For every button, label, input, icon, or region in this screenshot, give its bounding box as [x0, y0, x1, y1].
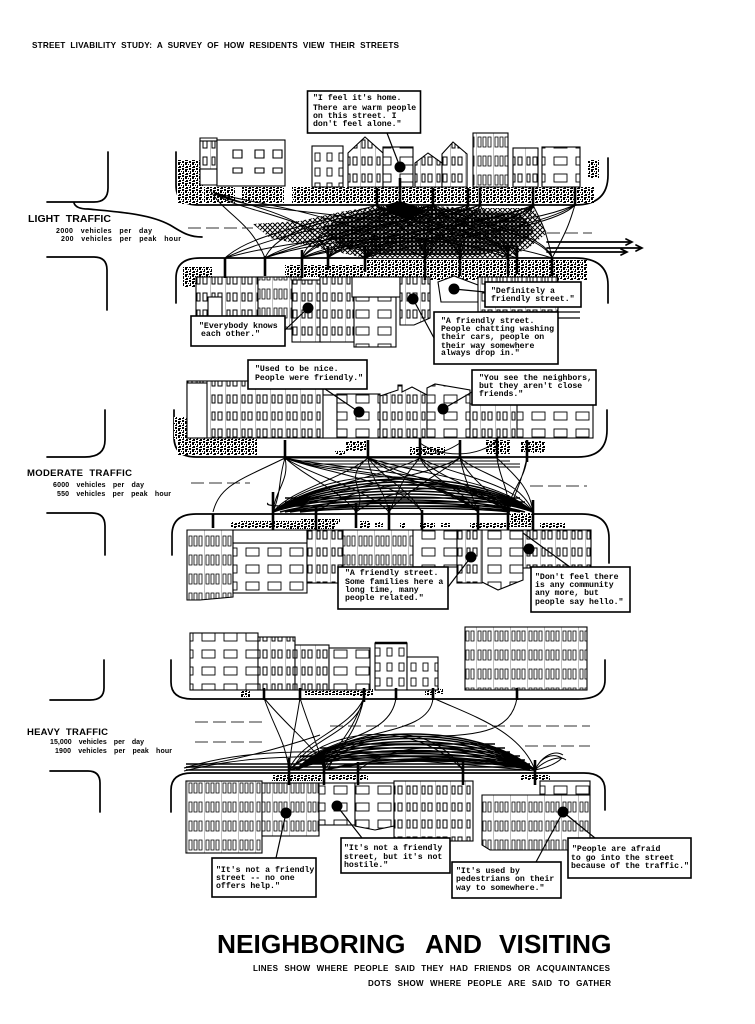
panel: light traffic street [28, 91, 642, 364]
callout: feel it's home: "I feel it's home. [313, 93, 401, 103]
traffic label: light: 200 vehicles per peak hour [61, 236, 181, 243]
friendship lines: moderate traffic network [191, 438, 587, 530]
callout: no community: people say hello." [535, 597, 623, 607]
callout: used by pedestrians [452, 806, 568, 898]
panel: moderate traffic street [27, 360, 630, 612]
callout: people chatting: their way somewhere [441, 341, 534, 351]
callout: feel it's home [308, 91, 420, 172]
callout: definitely friendly: "Definitely a [491, 286, 555, 296]
callout: everybody knows: each other." [201, 329, 260, 339]
callout: no community: "Don't feel there [535, 572, 619, 582]
traffic label: moderate: MODERATE TRAFFIC [27, 468, 132, 479]
traffic label: moderate: 550 vehicles per peak hour [57, 491, 171, 498]
traffic label: light [28, 213, 181, 243]
traffic label: light: 2000 vehicles per day [56, 228, 152, 235]
callout: used by pedestrians: pedestrians on their [456, 874, 554, 884]
callout: no community: any more, but [535, 588, 599, 598]
callout: afraid of traffic [563, 812, 691, 878]
callout: used to be nice [248, 360, 367, 418]
main heading: VISITING [499, 929, 612, 959]
side street curbs [47, 410, 105, 555]
callout: not hostile [332, 800, 450, 873]
callout: afraid of traffic: to go into the street [571, 853, 674, 863]
callout: everybody knows [191, 302, 314, 346]
buildings: north side [171, 627, 605, 699]
callout: definitely friendly: friendly street." [491, 294, 575, 304]
callout: you see the neighbors: but they aren't close [479, 381, 582, 391]
traffic label: heavy: 15,000 vehicles per day [50, 739, 144, 746]
side street curbs [50, 660, 104, 812]
buildings: south side [176, 258, 608, 347]
callout: no one offers help [212, 808, 316, 897]
callout: people chatting: always drop in." [441, 348, 520, 358]
callout: no one offers help: offers help." [216, 881, 280, 891]
friendship lines: heavy traffic network [184, 688, 590, 785]
callout: feel it's home: There are warm people [313, 103, 416, 113]
callout: you see the neighbors [438, 370, 596, 414]
callout: people chatting: People chatting washing [441, 324, 554, 334]
callout: you see the neighbors: friends." [479, 389, 523, 399]
survey title: STREET LIVABILITY STUDY: A SURVEY OF HOW RESIDENTS VIEW THEIR STREETS [32, 41, 400, 50]
buildings: north side [176, 133, 608, 205]
buildings: south side [172, 513, 609, 600]
traffic label: heavy: 1900 vehicles per peak hour [55, 748, 172, 755]
callout: families a long time: long time, many [345, 585, 419, 595]
buildings: south side [171, 773, 605, 853]
callout: no community: is any community [535, 580, 614, 590]
callout: everybody knows: "Everybody knows [199, 321, 278, 331]
callout: used to be nice: People were friendly." [255, 373, 363, 383]
main heading: AND [425, 929, 482, 959]
traffic label: heavy: HEAVY TRAFFIC [27, 727, 108, 738]
main heading: NEIGHBORING [217, 929, 405, 959]
callout: no community [523, 533, 630, 612]
callout: no one offers help: street -- no one [216, 874, 295, 883]
road centre line and traffic arrows [188, 228, 642, 255]
panel: heavy traffic street [27, 627, 691, 898]
side street curbs [47, 152, 202, 310]
callout: people chatting: "A friendly street. [441, 316, 534, 326]
traffic label: moderate [27, 468, 171, 498]
legend text: lines: LINES SHOW WHERE PEOPLE SAID THEY HAD FRIENDS OR ACQUAINTANCES [253, 964, 611, 973]
callout: feel it's home: don't feel alone." [313, 119, 401, 129]
callout: definitely friendly [448, 282, 581, 307]
callout: used by pedestrians: way to somewhere." [456, 883, 544, 893]
callout: families a long time: "A friendly street. [345, 568, 438, 578]
traffic label: light: LIGHT TRAFFIC [28, 213, 111, 225]
callout: afraid of traffic: "People are afraid [572, 844, 661, 854]
callout: used to be nice: "Used to be nice. [255, 364, 339, 374]
legend text: dots: DOTS SHOW WHERE PEOPLE ARE SAID TO GATHER [368, 979, 611, 988]
callout: no one offers help: "It's not a friendly [216, 865, 314, 875]
callout: people chatting [408, 294, 558, 364]
callout: not hostile: street, but it's not [344, 852, 442, 862]
friendship lines: light traffic network [210, 178, 575, 280]
callout: families a long time: people related." [345, 593, 424, 603]
callout: people chatting: their cars, people on [441, 332, 544, 342]
callout: you see the neighbors: "You see the neighbors, [479, 373, 592, 383]
callout: not hostile: "It's not a friendly [344, 843, 442, 853]
callout: not hostile: hostile." [344, 860, 388, 870]
callout: families a long time [338, 552, 476, 609]
traffic label: heavy [27, 727, 172, 755]
buildings: north side [174, 381, 607, 457]
callout: used by pedestrians: "It's used by [456, 866, 520, 876]
callout: afraid of traffic: because of the traffic." [571, 861, 689, 871]
callout: feel it's home: on this street. I [313, 111, 397, 121]
traffic label: moderate: 6000 vehicles per day [53, 482, 144, 489]
callout: families a long time: Some families here a [345, 577, 443, 587]
